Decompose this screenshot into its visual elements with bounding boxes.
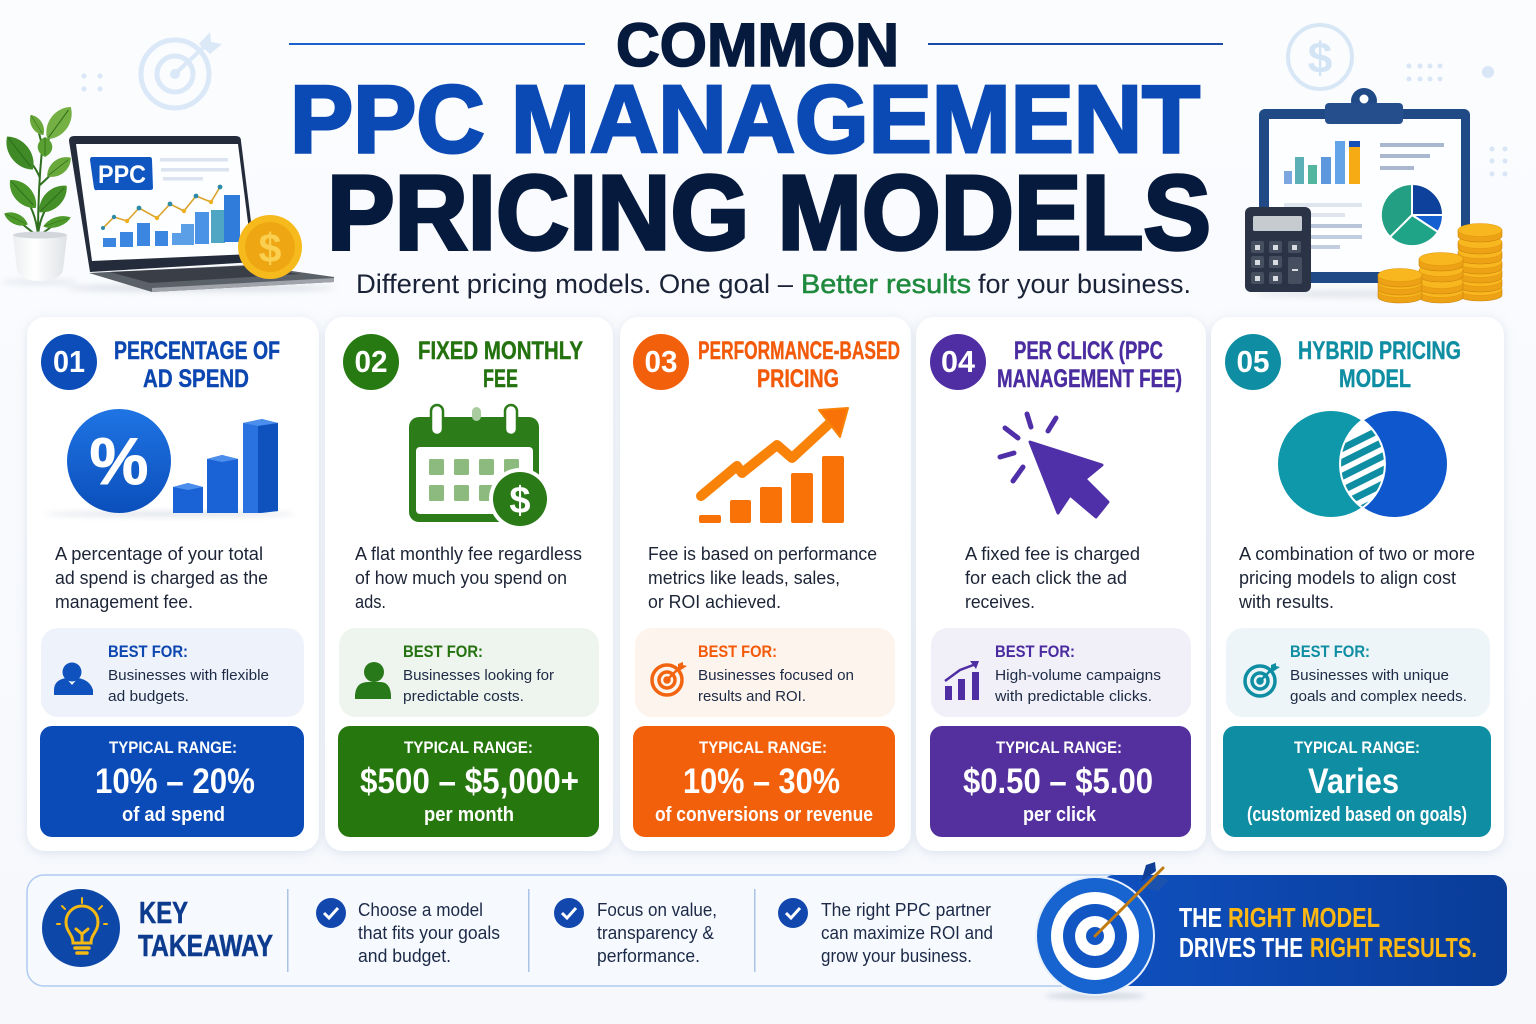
heading: key takeaway: TAKEAWAY xyxy=(138,928,273,963)
typical range: TYPICAL RANGE: xyxy=(109,738,237,757)
icon: person xyxy=(355,662,391,699)
description: A combination of two or more xyxy=(1239,544,1475,564)
heading xyxy=(418,337,583,393)
badge: 05: 05 xyxy=(1236,344,1270,379)
typical range: of ad spend xyxy=(122,804,225,826)
typical range: TYPICAL RANGE: xyxy=(1294,738,1420,757)
description: with results. xyxy=(1238,592,1334,612)
description: Fee is based on performance xyxy=(648,544,877,564)
description: receives. xyxy=(965,592,1035,612)
typical range xyxy=(633,726,895,837)
typical range: TYPICAL RANGE: xyxy=(996,738,1122,757)
icon: faint dollar decoration xyxy=(1288,25,1508,176)
banner: right model right results: THE xyxy=(1179,902,1222,933)
icon: calendar with dollar xyxy=(409,405,551,530)
icon: percent and bars: % xyxy=(90,424,148,498)
description xyxy=(355,544,582,612)
best for panel: BEST FOR: xyxy=(698,642,777,661)
best for panel: predictable costs. xyxy=(403,688,524,705)
heading xyxy=(1298,337,1461,393)
typical range: per month xyxy=(424,804,514,826)
badge: 03 xyxy=(633,334,689,390)
best for panel xyxy=(635,628,895,717)
best for panel: results and ROI. xyxy=(698,688,806,705)
typical range: $500 – $5,000+ xyxy=(360,762,579,801)
icon: faint target decoration xyxy=(82,32,222,108)
icon: calculator xyxy=(1245,207,1311,292)
typical range xyxy=(1223,726,1491,837)
heading: FEE xyxy=(483,365,518,393)
typical range: 10% – 20% xyxy=(95,762,255,801)
best for panel: Businesses looking for xyxy=(403,667,554,684)
badge: 03: 03 xyxy=(644,344,678,379)
heading: PERFORMANCE-BASED xyxy=(698,337,900,365)
icon: people xyxy=(54,662,93,695)
best for panel xyxy=(339,628,599,717)
chart: pie xyxy=(1381,184,1443,246)
badge: 01 xyxy=(41,334,97,390)
best for panel: BEST FOR: xyxy=(1290,642,1370,661)
heading xyxy=(114,337,280,393)
description: pricing models to align cost xyxy=(1239,568,1456,588)
best for panel: BEST FOR: xyxy=(995,642,1075,661)
description xyxy=(648,544,877,612)
takeaway 2 xyxy=(554,898,717,966)
icon: calendar with dollar: $ xyxy=(509,480,531,522)
icon: teal target xyxy=(1245,663,1280,696)
typical range: $0.50 – $5.00 xyxy=(963,762,1153,801)
best for panel: High-volume campaigns xyxy=(995,667,1161,684)
panel: card 04 per click xyxy=(916,317,1206,851)
best for panel xyxy=(41,628,304,717)
badge: 01: 01 xyxy=(53,344,85,379)
typical range: 10% – 30% xyxy=(683,762,840,801)
takeaway 2: transparency & xyxy=(597,923,714,943)
badge: 05 xyxy=(1225,334,1281,390)
takeaway 2: performance. xyxy=(597,946,700,966)
icon: gold dollar coin xyxy=(238,215,302,279)
badge: PPC xyxy=(90,157,153,190)
heading xyxy=(698,337,900,393)
description: management fee. xyxy=(55,592,193,612)
badge: 04 xyxy=(930,334,986,390)
banner: right model right results: RIGHT RESULTS. xyxy=(1310,932,1477,963)
takeaway 3: grow your business. xyxy=(821,946,972,966)
takeaway 1: Choose a model xyxy=(358,900,483,920)
takeaway 3: can maximize ROI and xyxy=(821,923,993,943)
banner: right model right results: RIGHT MODEL xyxy=(1228,902,1380,933)
best for panel xyxy=(1226,628,1490,717)
panel: card 03 performance-based pricing xyxy=(620,317,911,851)
icon: gold dollar coin: $ xyxy=(259,225,282,271)
badge: 02: 02 xyxy=(354,344,388,379)
icon: light bulb xyxy=(42,889,120,967)
heading: PER CLICK (PPC xyxy=(1014,337,1163,365)
best for panel: Businesses focused on xyxy=(698,667,854,684)
description: A percentage of your total xyxy=(55,544,263,564)
description xyxy=(55,544,268,612)
title: PPC management: PPC MANAGEMENT xyxy=(290,66,1200,173)
badge: 04: 04 xyxy=(941,344,976,379)
best for panel: BEST FOR: xyxy=(403,642,483,661)
heading xyxy=(997,337,1182,393)
banner: right model right results xyxy=(1100,875,1507,986)
best for panel: ad budgets. xyxy=(108,688,189,705)
best for panel: with predictable clicks. xyxy=(994,688,1152,705)
typical range: TYPICAL RANGE: xyxy=(404,738,533,757)
icon: laptop with PPC chart xyxy=(65,136,335,292)
description: metrics like leads, sales, xyxy=(648,568,840,588)
badge: 02 xyxy=(343,334,399,390)
icon: potted plant xyxy=(0,101,78,285)
description: ads. xyxy=(355,592,386,612)
best for panel: goals and complex needs. xyxy=(1290,688,1467,705)
heading: PRICING xyxy=(757,365,839,393)
subtitle xyxy=(356,269,1191,299)
panel: card 01 percentage of ad spend xyxy=(27,317,319,851)
subtitle: for your business. xyxy=(978,269,1191,299)
typical range: (customized based on goals) xyxy=(1247,804,1467,826)
icon: cursor click xyxy=(1000,414,1108,517)
best for panel xyxy=(931,628,1191,717)
typical range xyxy=(930,726,1191,837)
takeaway 3: The right PPC partner xyxy=(821,900,991,920)
title: pricing models: PRICING MODELS xyxy=(327,154,1211,272)
panel: key takeaway xyxy=(27,875,1127,986)
heading: MANAGEMENT FEE) xyxy=(997,365,1182,393)
takeaway 1: and budget. xyxy=(358,946,451,966)
icon: clipboard report xyxy=(1245,88,1505,303)
icon: orange target xyxy=(652,662,687,695)
icon: coin stacks xyxy=(1378,224,1502,303)
description: ad spend is charged as the xyxy=(55,568,268,588)
icon: percent and bars xyxy=(45,409,295,516)
icon: rising bars xyxy=(945,661,979,700)
panel: card 02 fixed monthly fee xyxy=(325,317,613,851)
description: A flat monthly fee regardless xyxy=(355,544,582,564)
description: of how much you spend on xyxy=(355,568,567,588)
heading: HYBRID PRICING xyxy=(1298,337,1461,365)
description xyxy=(1238,544,1475,612)
icon: growth chart arrow xyxy=(699,408,848,523)
takeaway 1: that fits your goals xyxy=(358,923,500,943)
heading: FIXED MONTHLY xyxy=(418,337,583,365)
description xyxy=(965,544,1140,612)
title: common: COMMON xyxy=(616,11,899,79)
heading: key takeaway: KEY xyxy=(139,895,188,930)
heading: MODEL xyxy=(1339,365,1411,393)
heading: AD SPEND xyxy=(143,365,249,393)
typical range xyxy=(40,726,304,837)
best for panel: Businesses with unique xyxy=(1290,667,1449,684)
banner: right model right results: DRIVES THE xyxy=(1179,932,1303,963)
best for panel: BEST FOR: xyxy=(108,642,188,661)
best for panel: Businesses with flexible xyxy=(108,667,269,684)
panel: card 05 hybrid pricing model xyxy=(1211,317,1504,851)
badge: PPC: PPC xyxy=(98,161,146,189)
description: A fixed fee is charged xyxy=(965,544,1140,564)
takeaway 2: Focus on value, xyxy=(597,900,717,920)
typical range: Varies xyxy=(1308,762,1399,801)
typical range xyxy=(338,726,599,837)
typical range: of conversions or revenue xyxy=(655,804,873,826)
typical range: per click xyxy=(1023,804,1097,826)
icon: bullseye target with arrow xyxy=(1035,862,1169,998)
typical range: TYPICAL RANGE: xyxy=(699,738,827,757)
description: for each click the ad xyxy=(965,568,1127,588)
heading: key takeaway xyxy=(138,895,273,963)
subtitle: Different pricing models. One goal – xyxy=(356,269,793,299)
takeaway 3 xyxy=(778,898,993,966)
subtitle: Better results xyxy=(801,269,971,299)
icon: venn diagram xyxy=(1278,411,1447,517)
description: or ROI achieved. xyxy=(648,592,781,612)
heading: PERCENTAGE OF xyxy=(114,337,280,365)
takeaway 1 xyxy=(316,898,500,966)
icon: faint dollar decoration: $ xyxy=(1308,34,1332,83)
